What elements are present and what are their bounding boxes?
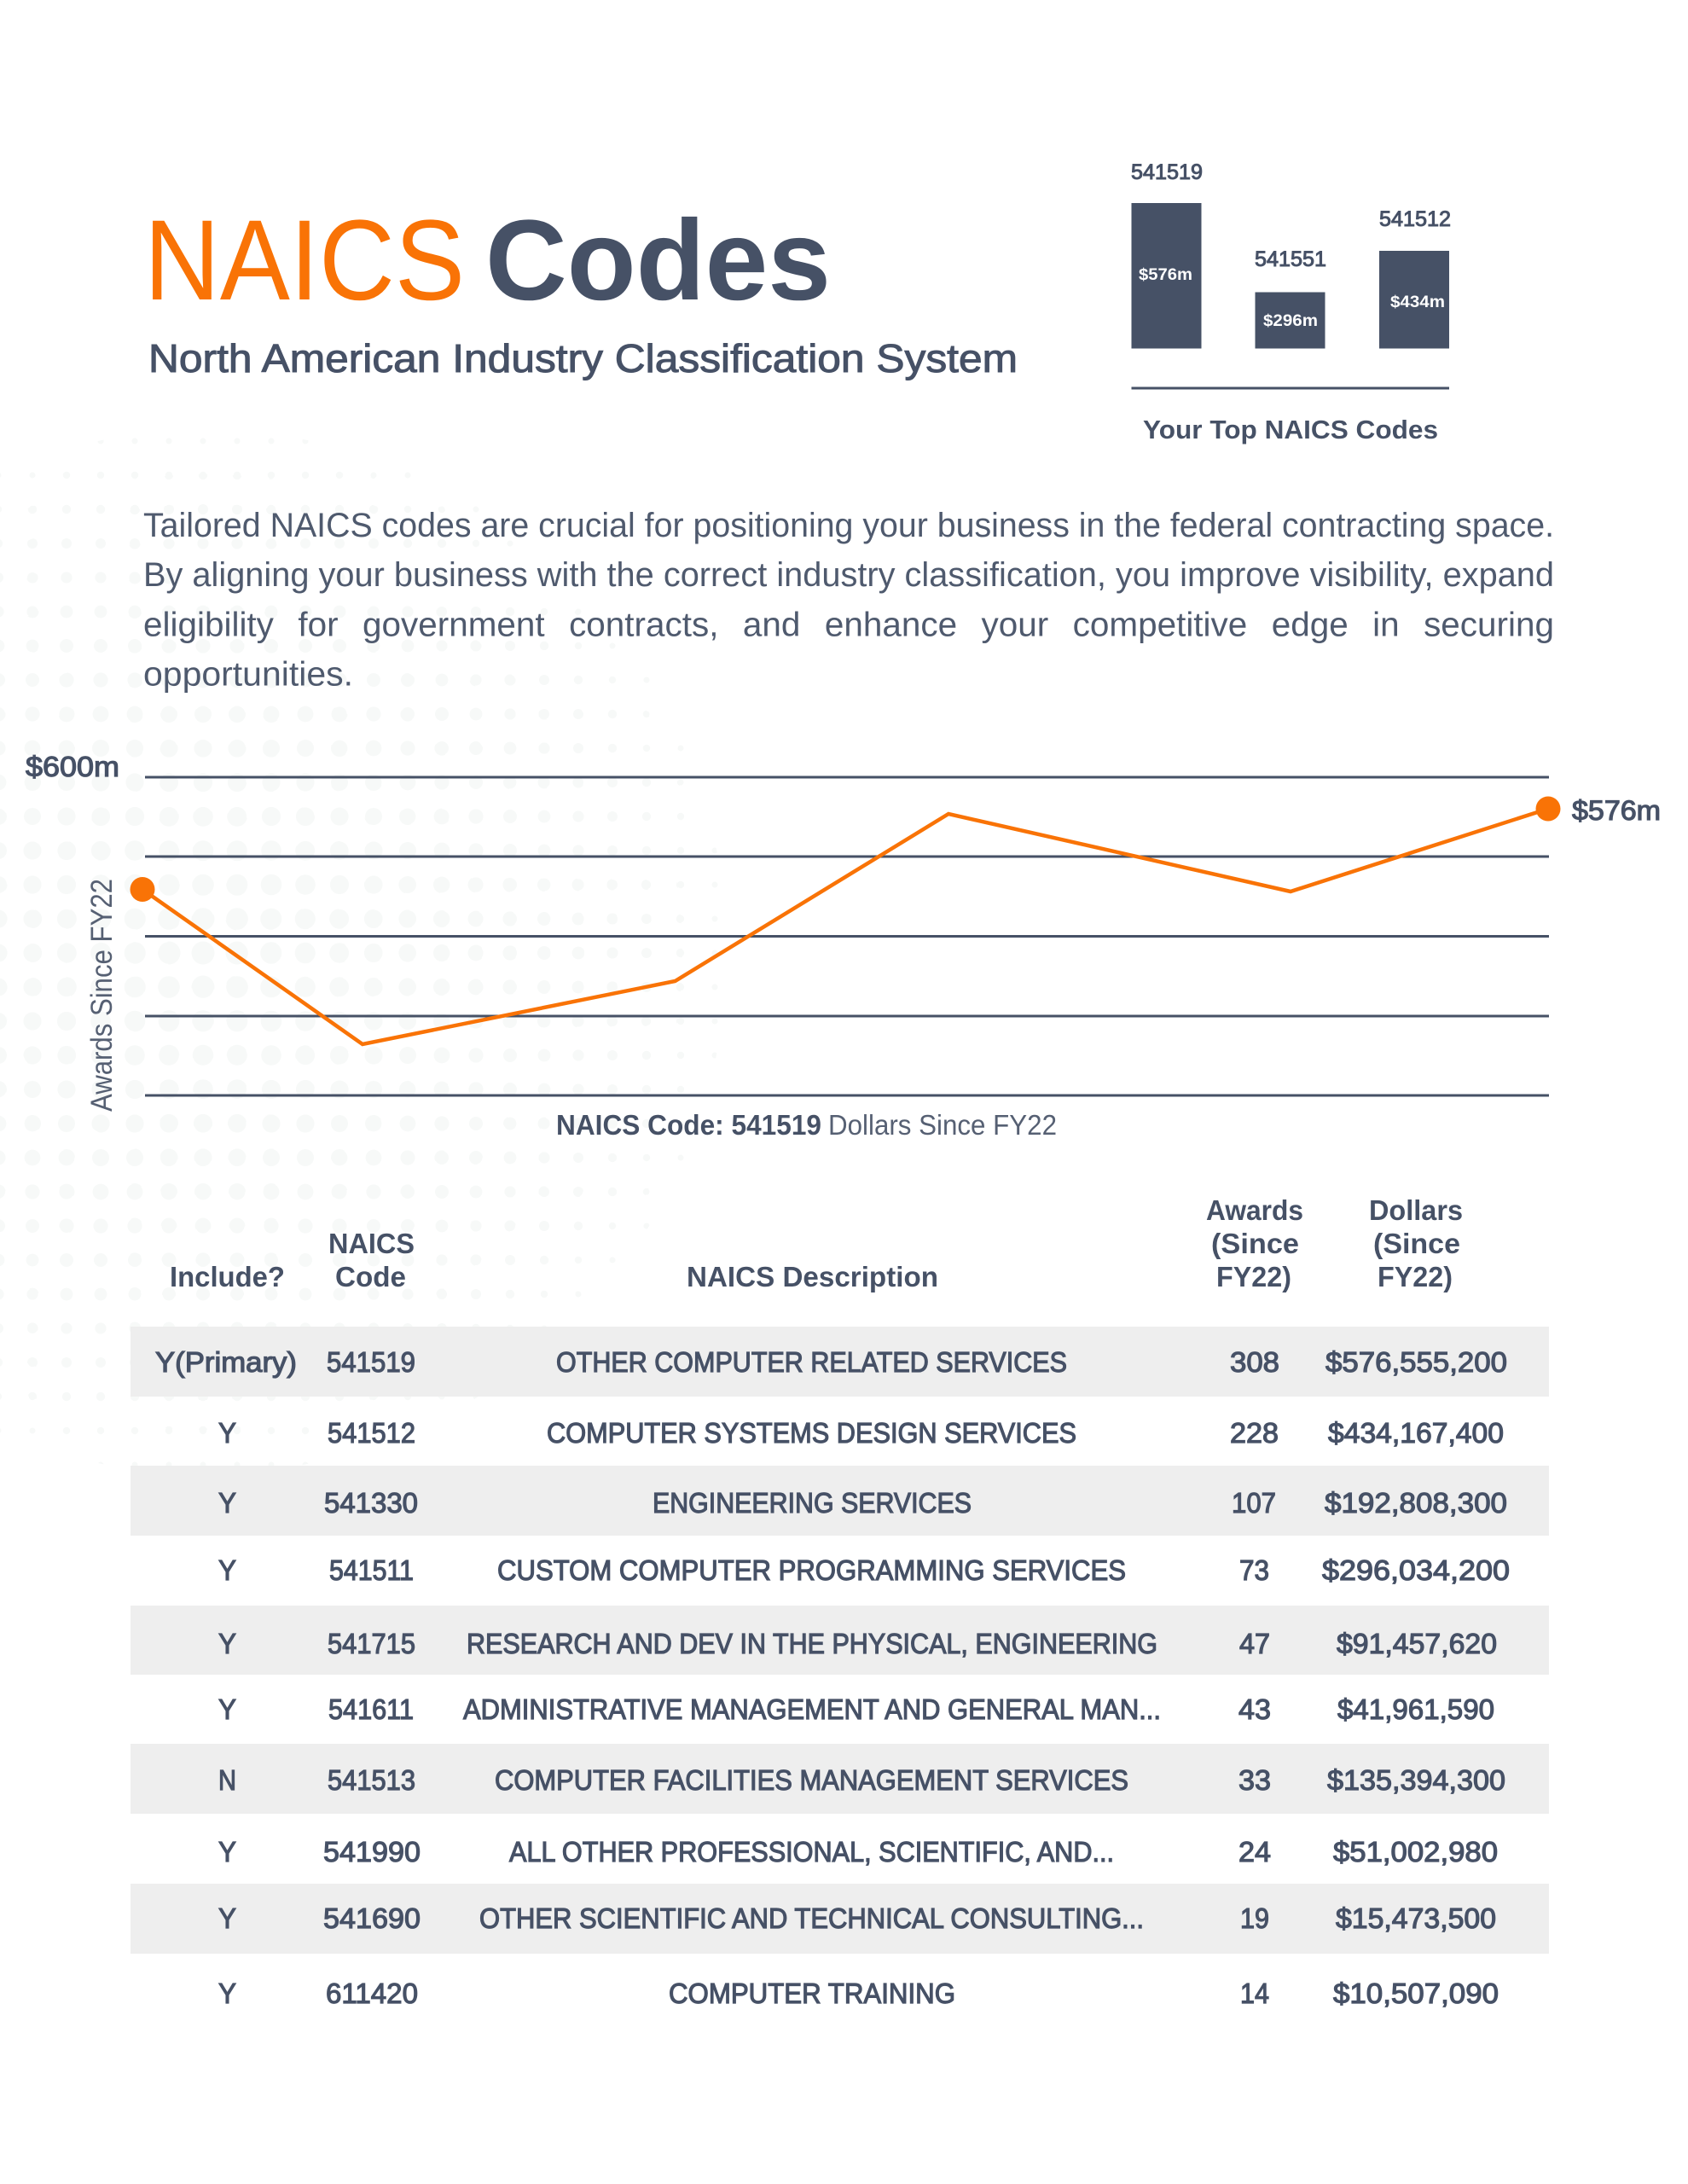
row 541519: Y(Primary) [155,1346,297,1378]
row 541690 [131,1884,1549,1954]
table header: Code [335,1261,406,1292]
y-axis top label: $600m [26,751,119,782]
intro paragraph: By aligning your business with the correct industry classification, you improve visibility, expand [143,556,1554,594]
row 541715: 47 [1239,1628,1270,1659]
row 541690: Y [218,1902,236,1934]
bar: 541551: 541551 [1255,247,1326,271]
bar: 541551: $296m [1263,312,1318,330]
row 541611: 541611 [328,1693,414,1725]
row 541512 [218,1417,1504,1449]
row 541511: Y [218,1554,236,1586]
row 541513: COMPUTER FACILITIES MANAGEMENT SERVICES [495,1764,1128,1796]
row 611420: $10,507,090 [1333,1978,1499,2009]
row 541690: 19 [1240,1902,1269,1934]
row 541715: $91,457,620 [1337,1628,1497,1659]
x-axis caption: NAICS Code: 541519 [556,1109,821,1141]
row 541990: ALL OTHER PROFESSIONAL, SCIENTIFIC, AND... [509,1836,1114,1867]
bar: 541519 [1131,160,1203,348]
row 541519: 541519 [327,1346,415,1378]
y-axis title: Awards Since FY22 [85,879,119,1112]
bar: 541551 [1255,247,1326,348]
table header: (Since [1373,1228,1460,1259]
row 541611 [218,1693,1494,1725]
row 541330: 107 [1232,1487,1276,1519]
row 611420: 611420 [326,1978,418,2009]
bar: 541519: $576m [1139,266,1192,284]
row 611420 [218,1978,1499,2009]
row 541330: ENGINEERING SERVICES [653,1487,972,1519]
row 541330: 541330 [324,1487,418,1519]
row 611420: COMPUTER TRAINING [669,1978,955,2009]
row 541511 [218,1554,1510,1586]
table header: FY22) [1378,1261,1453,1292]
table header: (Since [1211,1228,1299,1259]
row 541512: 541512 [328,1417,415,1449]
row 541513: 541513 [328,1764,415,1796]
subtitle: North American Industry Classification System [148,336,1018,380]
intro paragraph: eligibility for government contracts, and enhance your competitive edge in securing [143,606,1554,643]
bar: 541512: $434m [1390,293,1445,311]
bar: 541519: 541519 [1131,160,1203,184]
row 541330: $192,808,300 [1325,1487,1507,1519]
row 541512: 228 [1230,1417,1279,1449]
grid lines [145,776,1549,1097]
row 541513: N [218,1764,236,1796]
row 541611: Y [218,1693,236,1725]
row 541513: $135,394,300 [1327,1764,1505,1796]
row 541611: 43 [1238,1693,1271,1725]
start point [130,877,155,902]
x-axis caption: Dollars Since FY22 [828,1109,1057,1141]
row 541512: Y [218,1417,236,1449]
title word: NAICS: NAICS [144,197,465,324]
end value label: $576m [1572,795,1661,826]
intro paragraph: Tailored NAICS codes are crucial for positioning your business in the federal contracting space. [143,507,1554,544]
title word: Codes: Codes [485,197,831,324]
row 541715 [131,1606,1549,1675]
table header: NAICS Description [687,1261,938,1292]
row 541330: Y [218,1487,236,1519]
row 541513: 33 [1238,1764,1271,1796]
row 541513 [131,1744,1549,1814]
row 541715: RESEARCH AND DEV IN THE PHYSICAL, ENGINEERING [467,1628,1157,1659]
table header: Include? [170,1261,285,1292]
table header: FY22) [1216,1261,1291,1292]
row 541511: $296,034,200 [1322,1554,1510,1586]
row 541519: 308 [1230,1346,1279,1378]
row 541990: 24 [1238,1836,1271,1867]
row 541512: $434,167,400 [1328,1417,1504,1449]
row 541519: $576,555,200 [1325,1346,1507,1378]
row 541715: Y [218,1628,236,1659]
end point [1535,797,1561,821]
row 541990: $51,002,980 [1333,1836,1498,1867]
bar: 541512 [1379,207,1451,348]
line chart: dollars since FY22 [26,751,1661,1141]
bar: 541512: 541512 [1379,207,1451,231]
row 541511: 73 [1239,1554,1269,1586]
row 541519: OTHER COMPUTER RELATED SERVICES [556,1346,1067,1378]
row 541715: 541715 [328,1628,415,1659]
title [144,197,831,324]
table header: Awards [1206,1194,1303,1226]
row 541519 [131,1327,1549,1397]
row 541511: CUSTOM COMPUTER PROGRAMMING SERVICES [497,1554,1126,1586]
intro paragraph [143,507,1554,693]
table header [170,1194,1463,1292]
row 541690: 541690 [323,1902,421,1934]
row 541990 [218,1836,1498,1867]
bar chart: top NAICS codes [1131,160,1451,444]
intro paragraph: opportunities. [143,655,353,693]
row 541611: ADMINISTRATIVE MANAGEMENT AND GENERAL MAN... [463,1693,1161,1725]
row 541611: $41,961,590 [1337,1693,1494,1725]
row 541512: COMPUTER SYSTEMS DESIGN SERVICES [547,1417,1076,1449]
bar chart caption: Your Top NAICS Codes [1143,415,1438,444]
row 541990: 541990 [323,1836,421,1867]
row 541511: 541511 [329,1554,414,1586]
table header: NAICS [328,1228,415,1259]
trend line [142,809,1548,1044]
row 611420: 14 [1240,1978,1269,2009]
row 541690: OTHER SCIENTIFIC AND TECHNICAL CONSULTING... [479,1902,1144,1934]
table: NAICS codes [131,1194,1549,2009]
table header: Dollars [1369,1194,1463,1226]
x-axis caption [556,1109,1057,1141]
row 611420: Y [218,1978,236,2009]
row 541690: $15,473,500 [1336,1902,1496,1934]
bar chart baseline [1131,387,1449,389]
row 541990: Y [218,1836,236,1867]
row 541330 [131,1466,1549,1536]
